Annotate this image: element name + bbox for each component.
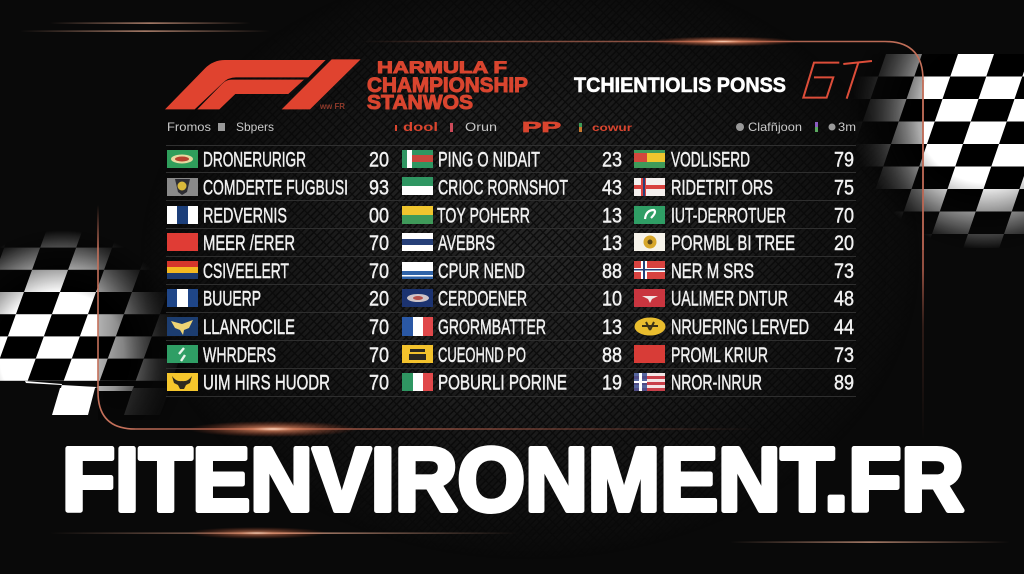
title: HARMULA F xyxy=(377,58,507,77)
logo suffix: ww FR xyxy=(319,102,345,111)
row: Buuerp xyxy=(167,288,389,310)
row: Poburli Porine: 19 xyxy=(602,372,622,394)
lower accent line left xyxy=(50,527,520,539)
row: Nror-Inrur: 89 xyxy=(834,372,854,394)
row: Redvernis xyxy=(167,204,389,228)
standings column 1 xyxy=(167,148,389,394)
row: Buuerp: 20 xyxy=(369,288,389,310)
row: Nror-Inrur: NROR-INRUR xyxy=(671,372,762,394)
row: Cerdoener: CERDOENER xyxy=(438,288,527,310)
accent streaks top left xyxy=(20,22,270,32)
table header: Sbpers xyxy=(236,120,274,134)
table header: Orun xyxy=(465,120,497,134)
row: Csiveelert: CSIVEELERT xyxy=(203,260,289,283)
table header: Fromos xyxy=(167,120,211,134)
row: Dronerurigr: DRONERURIGR xyxy=(203,148,306,172)
row: Meer Verer: 70 xyxy=(369,232,389,255)
website wordmark: FITENVIRONMENT.FR xyxy=(62,430,964,530)
row: Ner M Srs: 73 xyxy=(834,260,854,283)
row: Csiveelert: 70 xyxy=(369,260,389,283)
row: Avebrs: 13 xyxy=(602,232,622,255)
row: Llanrocile: LLANROCILE xyxy=(203,316,295,339)
row: Nror-Inrur xyxy=(634,372,854,394)
row: Cpur Nend xyxy=(402,260,622,283)
rounded frame xyxy=(98,42,923,440)
row: Proml Kriur: 73 xyxy=(834,344,854,367)
row: Cpur Nend: CPUR NEND xyxy=(438,260,525,283)
row: Comderte Fugbusi: 93 xyxy=(369,176,389,200)
row: Vodliserd: VODLISERD xyxy=(671,148,750,172)
row: Ualimer Dntur: UALIMER DNTUR xyxy=(671,288,788,310)
row: Ping O Nidait xyxy=(402,148,622,172)
row: Whrders: WHRDERS xyxy=(203,344,276,367)
title: STANWOS xyxy=(367,92,473,114)
row: Vodliserd xyxy=(634,148,854,172)
row: Llanrocile xyxy=(167,316,389,339)
checkered flag right xyxy=(850,50,1024,250)
row: Cueohnd Po: CUEOHND PO xyxy=(438,344,526,367)
title: CHAMPIONSHIP xyxy=(367,74,528,97)
table header xyxy=(166,119,856,146)
row: Ridetrit Ors xyxy=(634,176,854,200)
lower accent line right xyxy=(730,542,1010,543)
row: Dronerurigr: 20 xyxy=(369,148,389,172)
row: Toy Poherr: TOY POHERR xyxy=(437,204,530,228)
title xyxy=(367,58,528,114)
F1 logo xyxy=(165,59,361,109)
row: Uim Hirs Huodr: UIM HIRS HUODR xyxy=(203,372,330,394)
row: Ridetrit Ors: RIDETRIT ORS xyxy=(671,176,773,200)
GT logo xyxy=(803,61,872,99)
row: Whrders xyxy=(167,344,389,367)
table header: PP xyxy=(522,119,561,136)
checkered flag left xyxy=(0,232,176,415)
row: Ping O Nidait: 23 xyxy=(602,148,622,172)
row: Cueohnd Po xyxy=(402,344,622,367)
row: Redvernis: REDVERNIS xyxy=(203,204,287,228)
table header: cowur xyxy=(592,123,632,134)
row: Grormbatter: GRORMBATTER xyxy=(438,316,546,339)
row: Nruering Lerved: NRUERING LERVED xyxy=(671,316,809,339)
row: Pormbl Bi Tree: PORMBL BI TREE xyxy=(671,232,795,255)
row: Redvernis: 00 xyxy=(369,204,389,228)
row: Meer Verer xyxy=(167,232,389,255)
row: Avebrs xyxy=(402,232,622,255)
row: Ner M Srs: NER M SRS xyxy=(671,260,754,283)
row: Proml Kriur: PROML KRIUR xyxy=(671,344,768,367)
row: Toy Poherr xyxy=(402,204,622,228)
standings column 2 xyxy=(402,148,622,394)
frame glow bottom xyxy=(188,421,358,437)
row: Whrders: 70 xyxy=(369,344,389,367)
row: Pormbl Bi Tree: 20 xyxy=(834,232,854,255)
standings column 3 xyxy=(634,148,854,394)
row: Crioc Rornshot: 43 xyxy=(602,176,622,200)
row: Iut-Derrotuer: IUT-DERROTUER xyxy=(671,204,786,228)
table header: Clafñjoon xyxy=(748,120,802,134)
row: Ualimer Dntur: 48 xyxy=(834,288,854,310)
row: Iut-Derrotuer: 70 xyxy=(834,204,854,228)
row: Csiveelert xyxy=(167,260,389,283)
table header: 3m xyxy=(838,120,856,134)
table header: dool xyxy=(403,120,438,134)
row: Ner M Srs xyxy=(634,260,854,283)
row: Grormbatter: 13 xyxy=(602,316,622,339)
row: Toy Poherr: 13 xyxy=(602,204,622,228)
row: Nruering Lerved: 44 xyxy=(834,316,854,339)
row: Crioc Rornshot: CRIOC RORNSHOT xyxy=(438,176,568,200)
row: Cueohnd Po: 88 xyxy=(602,344,622,367)
row: Uim Hirs Huodr: 70 xyxy=(369,372,389,394)
frame glow top xyxy=(648,36,798,46)
row: Cerdoener: 10 xyxy=(602,288,622,310)
row: Ping O Nidait: PING O NIDAIT xyxy=(438,148,540,172)
row: Comderte Fugbusi: COMDERTE FUGBUSI xyxy=(203,176,348,200)
row: Cpur Nend: 88 xyxy=(602,260,622,283)
row: Poburli Porine: POBURLI PORINE xyxy=(438,372,567,394)
secondary heading: TCHIENTIOLIS PONSS xyxy=(574,74,786,97)
row: Meer Verer: MEER /ERER xyxy=(203,232,295,255)
row: Cerdoener xyxy=(402,288,622,310)
row: Proml Kriur xyxy=(634,344,854,367)
row: Vodliserd: 79 xyxy=(834,148,854,172)
row: Buuerp: BUUERP xyxy=(203,288,261,310)
row: Avebrs: AVEBRS xyxy=(438,232,495,255)
row: Ridetrit Ors: 75 xyxy=(834,176,854,200)
row dividers xyxy=(166,172,856,397)
background carbon texture xyxy=(222,23,838,498)
row: Llanrocile: 70 xyxy=(369,316,389,339)
